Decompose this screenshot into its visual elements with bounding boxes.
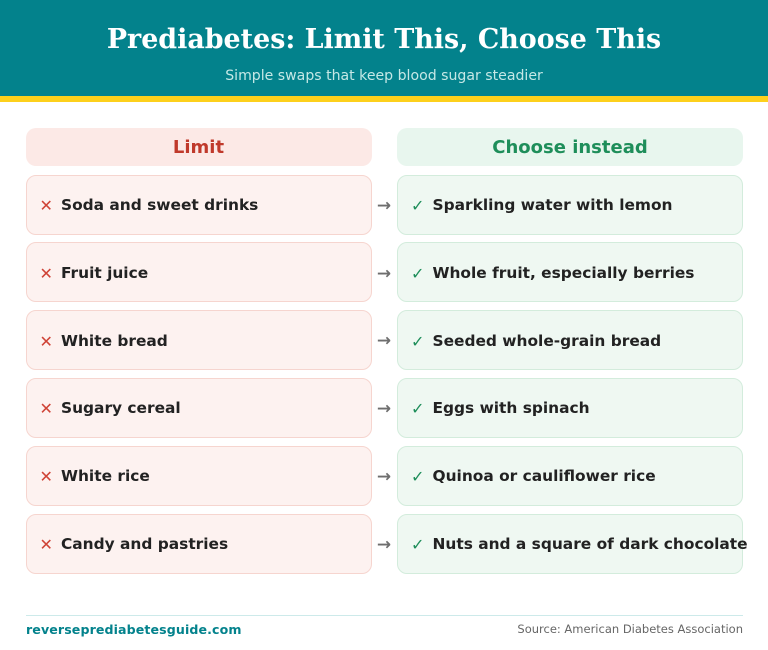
column heading: limit: Limit	[173, 137, 224, 158]
limit card	[26, 446, 372, 506]
column heading: limit	[26, 128, 372, 166]
choose card	[397, 310, 743, 370]
choose card	[397, 446, 743, 506]
choose card: ✓	[411, 196, 424, 215]
choose card: Quinoa or cauliflower rice	[432, 467, 656, 485]
choose card	[397, 175, 743, 235]
limit card	[26, 175, 372, 235]
limit card: Sugary cereal	[61, 399, 181, 417]
choose card: ✓	[411, 264, 424, 283]
header banner	[0, 0, 768, 102]
choose card: ✓	[411, 467, 424, 486]
arrow: →	[377, 535, 391, 555]
row 1	[26, 175, 743, 235]
row 3	[26, 310, 743, 370]
row 4	[26, 378, 743, 438]
choose card: ✓	[411, 399, 424, 418]
choose card: Eggs with spinach	[432, 399, 590, 417]
limit card: Candy and pastries	[61, 535, 228, 553]
footer	[26, 615, 743, 645]
choose card: Whole fruit, especially berries	[432, 264, 694, 282]
choose card: ✓	[411, 332, 424, 351]
arrow: →	[377, 196, 391, 216]
limit card: White bread	[61, 332, 168, 350]
limit card: ✕	[40, 332, 53, 351]
limit card	[26, 378, 372, 438]
source: Source: American Diabetes Association	[517, 622, 743, 636]
limit card	[26, 310, 372, 370]
subtitle: Simple swaps that keep blood sugar steadier	[225, 68, 543, 84]
title: Prediabetes: Limit This, Choose This	[107, 24, 661, 54]
row 5	[26, 446, 743, 506]
limit card: ✕	[40, 264, 53, 283]
arrow: →	[377, 467, 391, 487]
limit card	[26, 242, 372, 302]
choose card: Seeded whole-grain bread	[432, 332, 661, 350]
website: reverseprediabetesguide.com	[26, 622, 242, 637]
limit card: Fruit juice	[61, 264, 148, 282]
choose card: Sparkling water with lemon	[432, 196, 672, 214]
arrow: →	[377, 399, 391, 419]
limit card: Soda and sweet drinks	[61, 196, 258, 214]
limit card	[26, 514, 372, 574]
arrow: →	[377, 264, 391, 284]
limit card: White rice	[61, 467, 150, 485]
row 6	[26, 514, 748, 574]
choose card: Nuts and a square of dark chocolate	[432, 535, 748, 553]
choose card	[397, 514, 743, 574]
arrow: →	[377, 331, 391, 351]
limit card: ✕	[40, 535, 53, 554]
limit card: ✕	[40, 196, 53, 215]
choose card	[397, 378, 743, 438]
row 2	[26, 242, 743, 302]
choose card	[397, 242, 743, 302]
column heading: choose instead	[397, 128, 743, 166]
limit card: ✕	[40, 467, 53, 486]
limit card: ✕	[40, 399, 53, 418]
column heading: choose instead: Choose instead	[492, 137, 648, 158]
choose card: ✓	[411, 535, 424, 554]
